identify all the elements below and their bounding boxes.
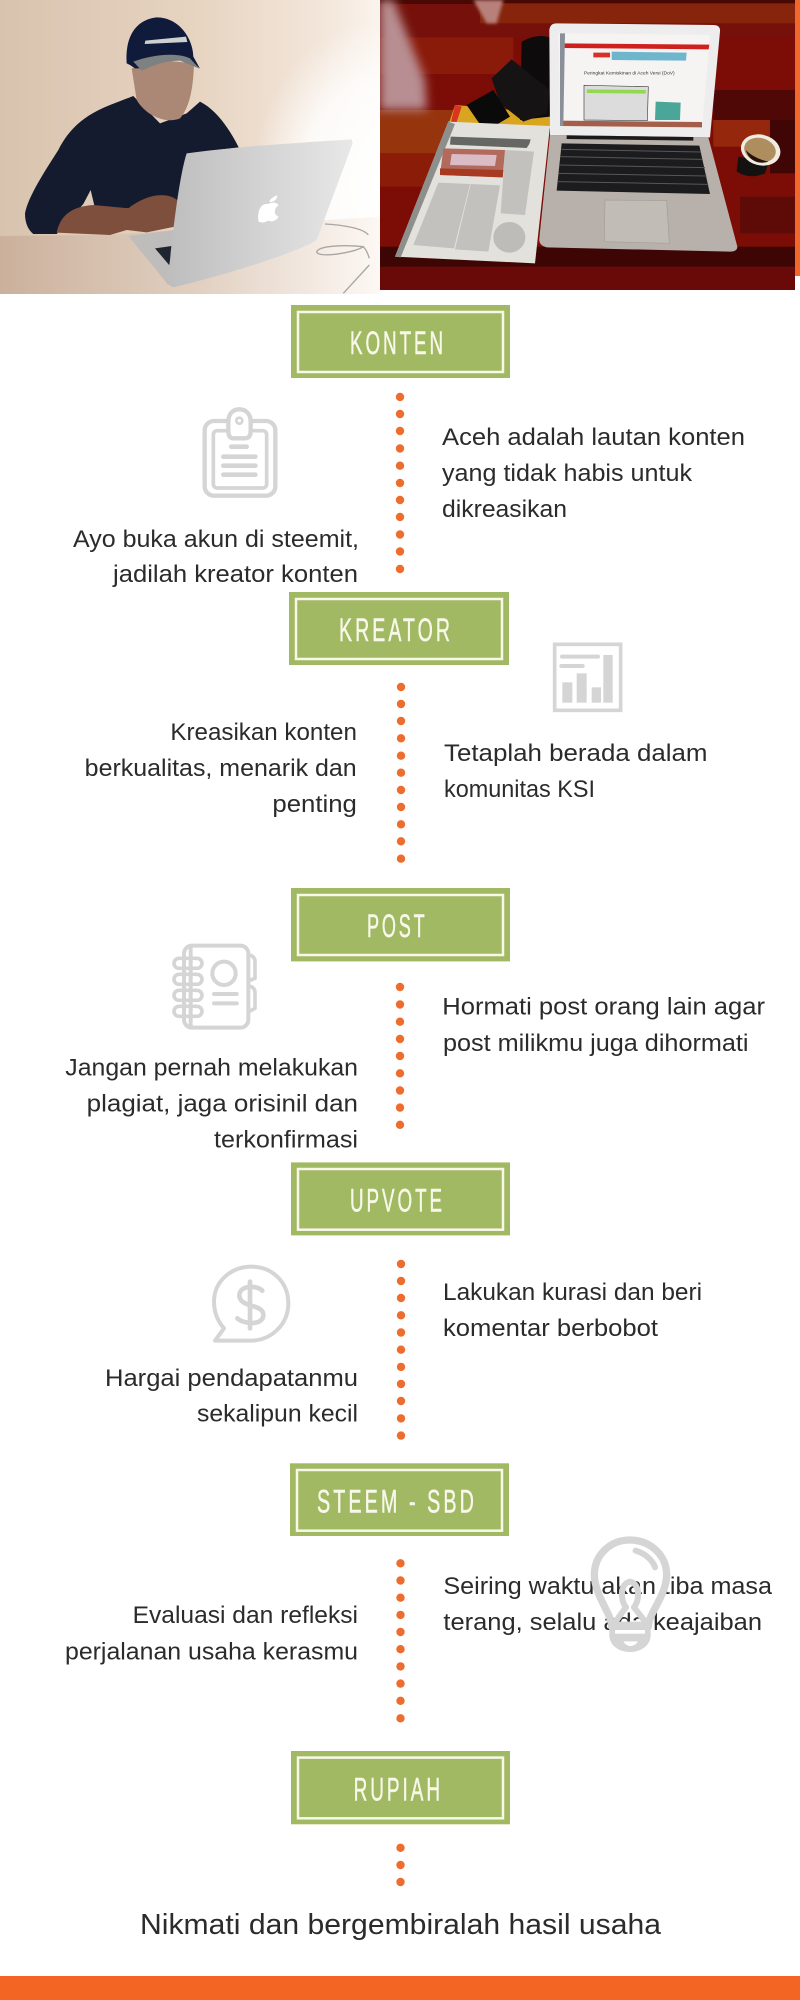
text: Jangan pernah melakukan plagiat — [65, 1054, 358, 1153]
section: KONTEN — [73, 305, 745, 588]
text: Jangan pernah melakukan plagiat: terkonfirmasi — [214, 1126, 358, 1153]
section: POST — [65, 888, 765, 1153]
heading box: POST: POST — [367, 908, 428, 944]
text: Kreasikan konten — [85, 719, 357, 818]
text: Kreasikan konten: penting — [272, 791, 357, 818]
heading box: RUPIAH: RUPIAH — [354, 1772, 443, 1808]
text: Aceh adalah lautan konten: dikreasikan — [442, 496, 567, 523]
decorative orange stripe at top right — [795, 0, 800, 276]
footer bar — [0, 1976, 800, 2000]
icon: speech bubble with dollar sign — [214, 1267, 288, 1341]
heading box: KREATOR: KREATOR — [339, 612, 453, 648]
text: Seiring waktu: terang, selalu ada keajaiban — [443, 1609, 762, 1636]
heading box: KONTEN — [291, 305, 510, 378]
dotted connector — [396, 393, 404, 573]
section: UPVOTE — [105, 1162, 702, 1440]
text: Kreasikan konten: berkualitas, menarik dan — [85, 755, 357, 782]
text: Ayo buka akun di steemit — [73, 526, 359, 588]
heading box: KONTEN: KONTEN — [350, 325, 446, 361]
text: Tetaplah berada dalam: Tetaplah berada dalam — [444, 740, 708, 767]
text: Hargai pendapatanmu — [105, 1365, 358, 1428]
dotted connector — [397, 1260, 405, 1440]
text: Aceh adalah lautan konten: Aceh adalah lautan konten — [442, 424, 745, 451]
heading box: STEEM - SBD: STEEM - SBD — [317, 1483, 477, 1519]
icon: address book — [174, 946, 255, 1028]
section: KREATOR — [85, 592, 707, 863]
text: Hormati post orang lain: post milikmu juga dihormati — [443, 1030, 748, 1057]
text: Lakukan kurasi: Lakukan kurasi dan beri — [443, 1279, 702, 1306]
text: Lakukan kurasi — [443, 1279, 702, 1342]
icon: light bulb — [594, 1540, 667, 1652]
text: Hargai pendapatanmu: sekalipun kecil — [197, 1401, 358, 1428]
heading box: STEEM - SBD — [290, 1463, 509, 1536]
heading box: KREATOR — [289, 592, 509, 665]
photo: laptop, magazine, camera and cup on a wooden table — [380, 0, 795, 290]
text: Hormati post orang lain — [442, 994, 765, 1057]
dotted connector — [396, 1844, 405, 1886]
photo: laptop, magazine, camera and cup on a wooden table: Peringkat Kemiskinan di Aceh Versi (DoV) — [584, 71, 675, 77]
heading box: RUPIAH — [291, 1751, 510, 1824]
text: Aceh adalah lautan konten: yang tidak habis untuk — [442, 460, 693, 487]
photo: man working on a laptop — [0, 0, 380, 294]
section: STEEM - SBD — [65, 1463, 773, 1723]
text: Evaluasi dan refleksi — [65, 1602, 358, 1665]
text: Jangan pernah melakukan plagiat: plagiat, jaga orisinil dan — [87, 1090, 358, 1118]
heading box: POST — [291, 888, 510, 961]
text: Aceh adalah lautan konten — [442, 424, 745, 523]
text: closing message: Nikmati dan bergembiralah hasil usaha — [140, 1909, 662, 1941]
text: Evaluasi dan refleksi: perjalanan usaha kerasmu — [65, 1638, 358, 1665]
dotted connector — [396, 1559, 405, 1723]
heading box: UPVOTE: UPVOTE — [350, 1182, 445, 1218]
text: Tetaplah berada dalam: komunitas KSI — [444, 776, 595, 803]
text: Jangan pernah melakukan plagiat: Jangan pernah melakukan — [65, 1054, 358, 1081]
text: Seiring waktu — [443, 1573, 773, 1636]
heading box: UPVOTE — [291, 1162, 510, 1235]
text: Ayo buka akun di steemit: jadilah kreator konten — [112, 561, 358, 588]
dotted connector — [396, 983, 404, 1129]
text: Evaluasi dan refleksi: Evaluasi dan refleksi — [133, 1602, 358, 1629]
section: RUPIAH — [140, 1751, 662, 1941]
text: Lakukan kurasi: komentar berbobot — [443, 1315, 658, 1342]
icon: report with bar chart — [555, 644, 621, 710]
text: Ayo buka akun di steemit: Ayo buka akun di steemit, — [73, 526, 359, 553]
icon: clipboard — [205, 409, 275, 496]
text: Hargai pendapatanmu: Hargai pendapatanmu — [105, 1365, 358, 1392]
text: Hormati post orang lain: Hormati post orang lain agar — [442, 994, 765, 1021]
dotted connector — [397, 683, 405, 863]
text: Tetaplah berada dalam — [444, 740, 708, 803]
text: Seiring waktu: Seiring waktu akan tiba masa — [443, 1573, 773, 1600]
text: Kreasikan konten: Kreasikan konten — [170, 719, 357, 746]
